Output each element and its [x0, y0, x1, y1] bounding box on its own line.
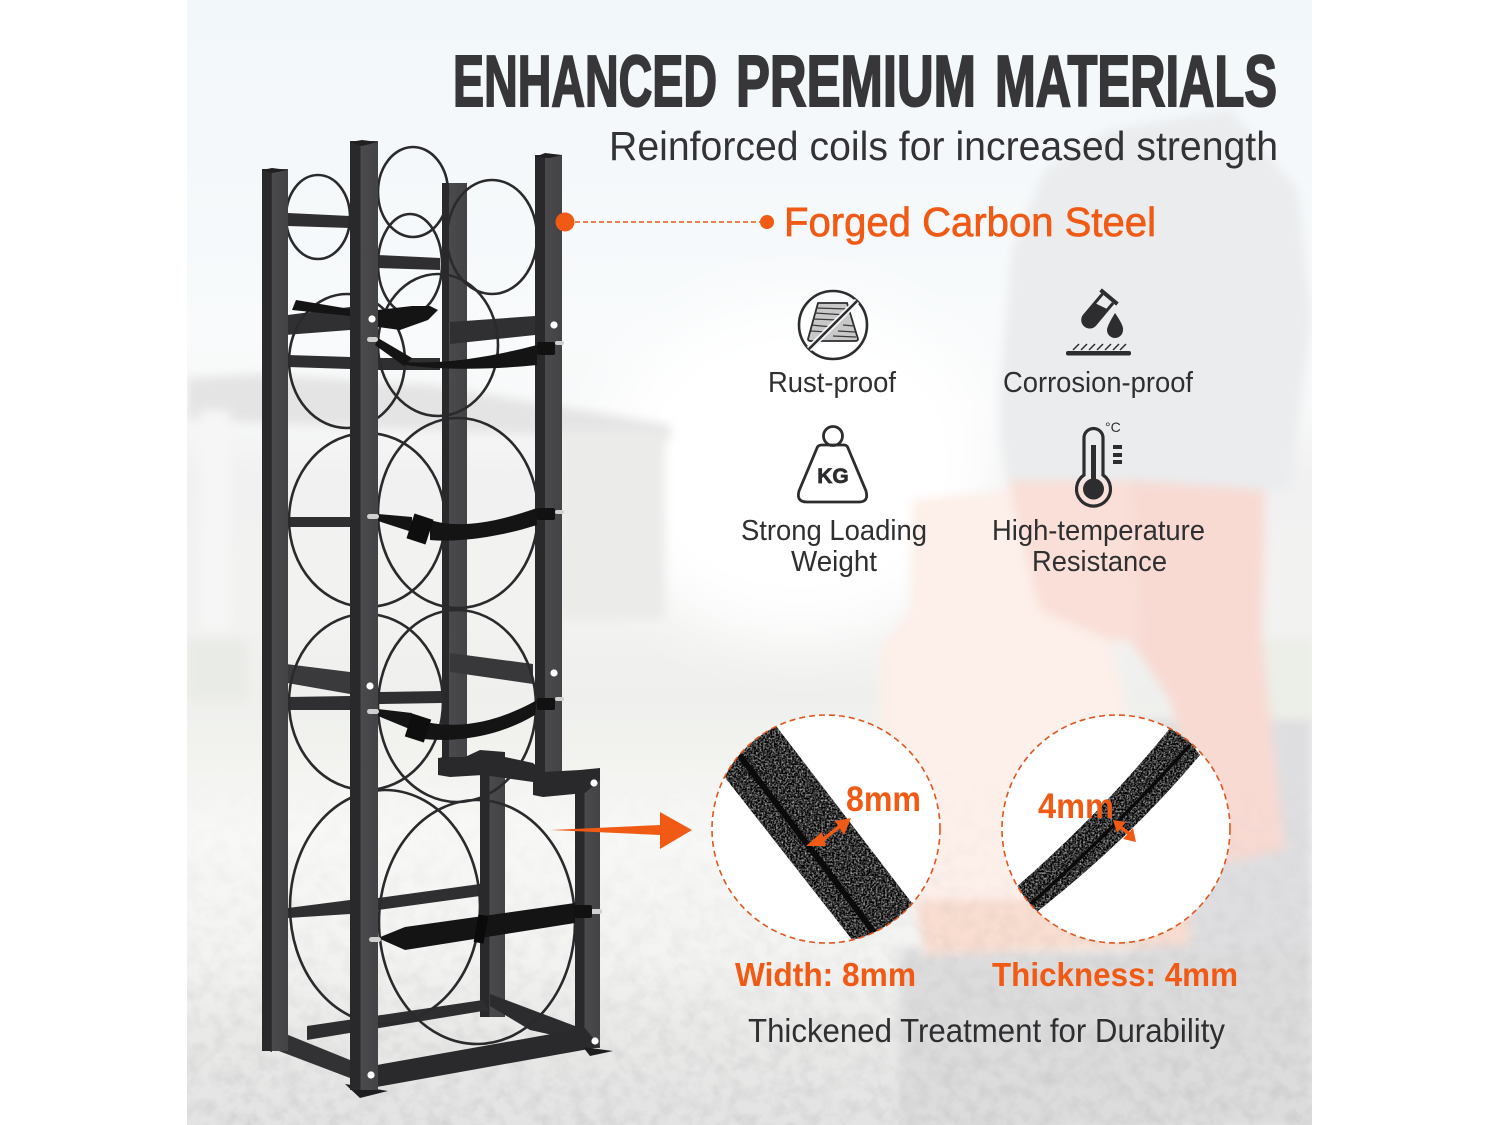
detail: width 8mm: [711, 714, 941, 944]
label: strong loading weight: [741, 515, 927, 578]
rack base frame: [262, 994, 613, 1098]
rack rear posts: [438, 153, 600, 1048]
8mm label: 8mm: [846, 780, 921, 819]
icon: test tube and drop: [1066, 288, 1131, 356]
icon: thermometer: [1076, 419, 1122, 506]
title: PREMIUM: [736, 42, 976, 122]
4mm label: 4mm: [1038, 787, 1114, 826]
feature: strong loading weight: [741, 426, 927, 578]
label: strong loading weight: Strong Loading: [741, 515, 927, 547]
title: ENHANCED: [453, 42, 717, 122]
rack upper crossbars: [270, 213, 535, 918]
icon: kg weight: KG: [817, 465, 849, 488]
rack step brackets: [438, 750, 600, 797]
width dimension arrow: [806, 818, 851, 846]
callout label: Forged Carbon Steel: [784, 199, 1156, 245]
subtitle: Reinforced coils for increased strength: [609, 123, 1278, 169]
title: MATERIALS: [995, 42, 1277, 122]
rack mounting holes: [366, 315, 599, 1079]
detail: thickness 4mm: [995, 715, 1230, 943]
label: corrosion-proof: Corrosion-proof: [1003, 367, 1193, 399]
label: high-temperature resistance: [992, 515, 1205, 578]
callout: forged carbon steel: [556, 199, 1156, 245]
callout end dot: [760, 215, 774, 229]
icon: kg weight: [798, 426, 867, 502]
arrow: rack to detail: [551, 812, 692, 849]
caption: durability: Thickened Treatment for Durability: [748, 1012, 1225, 1049]
securing straps: [292, 300, 575, 950]
feature: corrosion-proof: [1003, 288, 1193, 399]
callout dashed leader: [575, 221, 762, 223]
feature: rust-proof: [768, 291, 896, 399]
callout marker on post: [556, 212, 574, 232]
label: rust-proof: Rust-proof: [768, 367, 896, 399]
product: cylinder rack: [262, 140, 613, 1098]
caption: thickness: Thickness: 4mm: [992, 956, 1238, 993]
coil rings: [286, 147, 575, 1044]
strap buckles: [367, 337, 602, 944]
label: high-temperature resistance: High-temperature: [992, 515, 1205, 547]
label: strong loading weight: Weight: [791, 546, 877, 578]
icon: thermometer: °C: [1105, 419, 1121, 435]
rack front posts: [262, 140, 378, 1090]
feature: high-temperature resistance: [992, 419, 1205, 578]
icon: rust-proof: [799, 291, 867, 359]
label: high-temperature resistance: Resistance: [1032, 546, 1167, 578]
title: [453, 42, 1277, 122]
background photo panel: [187, 0, 1312, 1125]
thickness dimension arrow: [1113, 820, 1136, 842]
caption: width: Width: 8mm: [735, 956, 916, 993]
